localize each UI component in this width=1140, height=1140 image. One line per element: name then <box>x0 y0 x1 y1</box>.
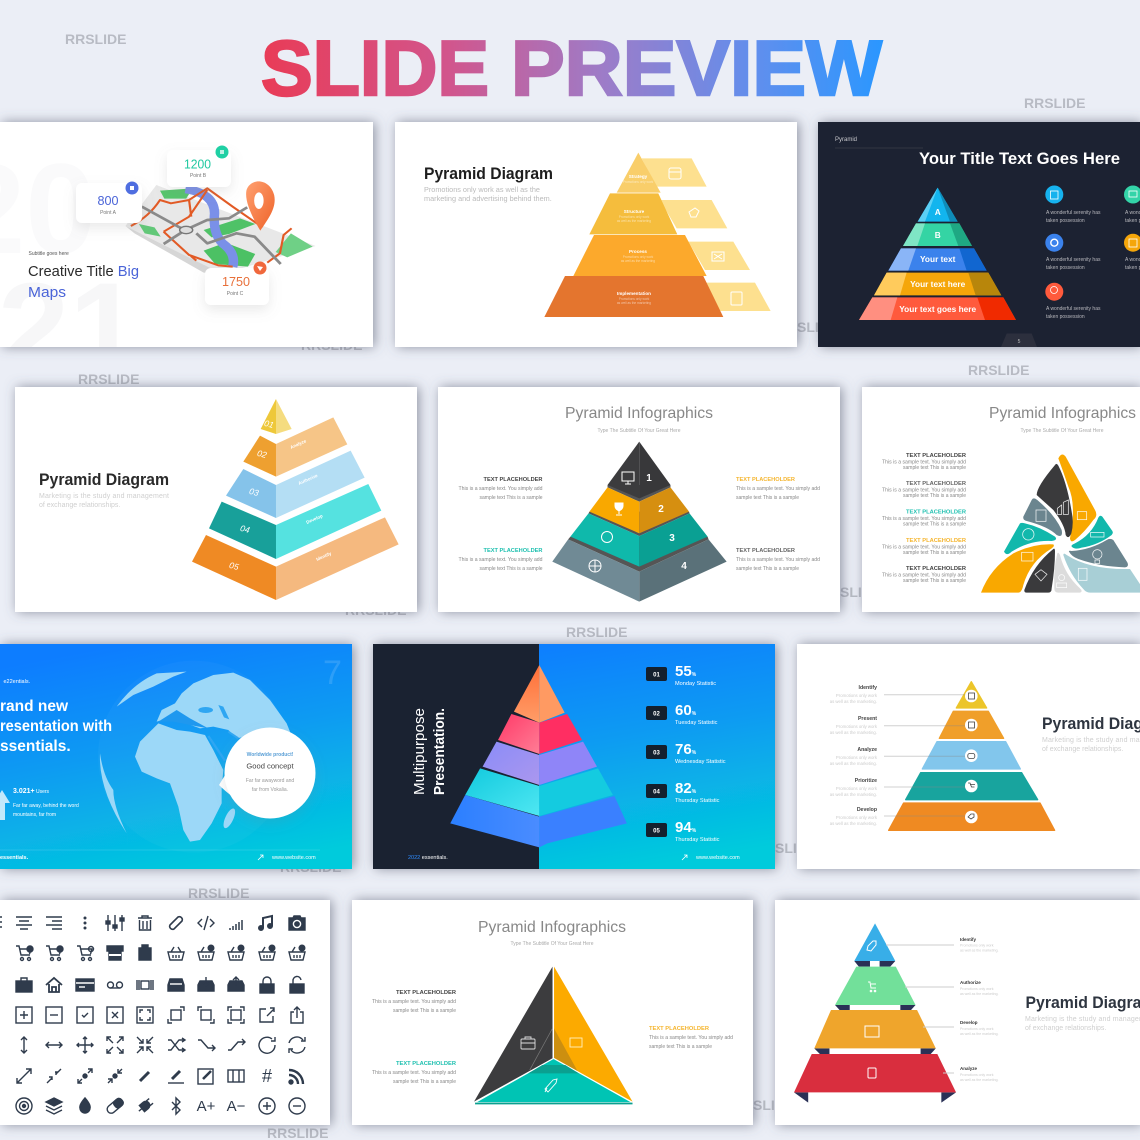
left captions: sample text This is a sample <box>393 1079 456 1085</box>
description <box>1025 1016 1140 1032</box>
tier labels: Identify <box>960 937 976 942</box>
big year numerals <box>0 138 140 400</box>
bubble text: far from Vokalia. <box>252 787 288 793</box>
tier labels: as well as the marketing. <box>960 992 999 996</box>
card: point b: 1200 <box>184 156 211 172</box>
speech bubble <box>219 728 316 818</box>
pyramid labels: Your text goes here <box>899 304 977 314</box>
tier labels: Develop <box>857 807 877 813</box>
panel: pyramid diagram isometric <box>15 387 417 612</box>
card: point a <box>76 182 142 223</box>
headline: rand new <box>0 698 69 715</box>
tier labels: as well as the marketing. <box>960 1078 999 1082</box>
description: of exchange relationships. <box>1025 1025 1106 1032</box>
tier labels: Present <box>858 716 877 722</box>
tier labels: as well as the marketing. <box>830 761 877 766</box>
tier notes: as well as the marketing <box>617 219 651 223</box>
headline: ssentials. <box>0 738 71 755</box>
stat rows: 55% <box>675 663 697 680</box>
side tabs <box>642 158 771 311</box>
caption list: TEXT PLACEHOLDER <box>906 538 966 544</box>
left captions: TEXT PLACEHOLDER <box>484 548 543 554</box>
description: Promotions only work as well as the <box>424 185 540 194</box>
spiral triangle <box>981 455 1140 593</box>
users stat: mountains, far from <box>13 812 56 818</box>
footer <box>0 850 320 861</box>
tier labels: Authorize <box>960 980 981 985</box>
icon row: miscellaneous: A− <box>227 1098 246 1115</box>
panel: multipurpose presentation <box>373 644 775 869</box>
right caption <box>649 1026 733 1050</box>
leader lines <box>886 945 954 1073</box>
watermarks: RRSLIDE <box>65 31 126 47</box>
icon row: resize and editing <box>17 1066 303 1086</box>
tier labels <box>617 174 651 296</box>
tier labels: Promotions only work <box>960 1073 994 1077</box>
tier labels: Promotions only work <box>836 724 878 729</box>
tier labels: Structure <box>624 209 645 214</box>
stat rows: 02 <box>653 712 660 718</box>
feature text: taken possession <box>1046 218 1085 224</box>
breadcrumb: Pyramid <box>835 137 857 143</box>
gradient pyramid <box>450 665 627 847</box>
tier notes: Promotions only work <box>623 180 654 184</box>
tier icons <box>589 472 634 572</box>
card: point c: 1750 <box>222 274 250 289</box>
watermarks: RRSLIDE <box>78 371 139 387</box>
heading: Your Title Text Goes Here <box>919 149 1120 168</box>
headline <box>0 698 112 755</box>
right captions: sample text This is a sample <box>736 566 799 572</box>
slide number: 7 <box>323 654 342 692</box>
panel: pyramid diagram stacked <box>775 900 1140 1125</box>
stat rows: 01 <box>653 672 660 678</box>
icon row: boxes and frames <box>16 1007 303 1023</box>
globe <box>98 661 293 853</box>
watermarks: RRSLIDE <box>1024 95 1085 111</box>
tier labels: Promotions only work <box>836 693 878 698</box>
3d pyramid <box>552 442 727 602</box>
tier captions: Analyze <box>289 438 307 450</box>
caption list: sample text This is a sample <box>903 493 966 499</box>
left captions: sample text This is a sample <box>393 1008 456 1014</box>
watermarks: RRSLIDE <box>280 859 341 875</box>
panel: globe blue slide <box>0 644 352 869</box>
tier labels: as well as the marketing. <box>960 1032 999 1036</box>
heading: Pyramid Diagram <box>424 164 553 183</box>
right caption: This is a sample text. You simply add <box>649 1035 733 1041</box>
subtitle: Type The Subtitle Of Your Great Here <box>1020 428 1104 434</box>
panel: dark pyramid <box>818 122 1140 347</box>
right captions <box>736 477 820 572</box>
card: point b <box>167 146 231 187</box>
tier labels: as well as the marketing. <box>830 730 877 735</box>
left captions: This is a sample text. You simply add <box>372 999 456 1005</box>
vertical title <box>411 708 448 795</box>
tier labels: Process <box>629 249 647 254</box>
card: point c: Point C <box>227 291 244 297</box>
caption list: sample text This is a sample <box>903 550 966 556</box>
watermarks: RRSLIDE <box>345 602 406 618</box>
stacked trapezoids <box>794 923 956 1103</box>
vertical title: Presentation. <box>431 708 448 795</box>
icon row: shopping <box>16 945 305 960</box>
icon row: alignment and tools <box>0 915 305 931</box>
tier labels: Strategy <box>629 174 648 179</box>
heading: Pyramid Diagram <box>39 470 169 489</box>
description <box>39 493 169 509</box>
tier numbers: 3 <box>669 533 675 544</box>
feature text <box>1046 210 1140 320</box>
title: slide preview <box>261 24 882 112</box>
tier labels: Analyze <box>857 747 877 753</box>
tier labels <box>960 937 999 1082</box>
headline: resentation with <box>0 718 112 735</box>
left captions <box>458 477 543 572</box>
footer: www.website.com <box>271 855 316 861</box>
caption list: TEXT PLACEHOLDER <box>906 453 966 459</box>
tier labels: as well as the marketing. <box>960 948 999 952</box>
tier captions <box>289 438 332 562</box>
folded triangle <box>474 967 633 1104</box>
tier labels: Promotions only work <box>836 786 878 791</box>
right captions: TEXT PLACEHOLDER <box>736 477 795 483</box>
icon row: miscellaneous: A+ <box>197 1098 216 1115</box>
tier labels <box>830 685 878 826</box>
caption list: sample text This is a sample <box>903 465 966 471</box>
panel: pyramid infographics four tiers <box>438 387 840 612</box>
left captions: This is a sample text. You simply add <box>458 557 543 563</box>
bubble text: Good concept <box>246 762 295 770</box>
caption list: sample text This is a sample <box>903 522 966 528</box>
tier numbers: 02 <box>256 448 268 460</box>
right caption: sample text This is a sample <box>649 1044 712 1050</box>
subtitle: Type The Subtitle Of Your Great Here <box>597 428 681 434</box>
caption list: This is a sample text. You simply add <box>882 488 966 494</box>
icon row: storage and security <box>16 976 304 993</box>
users stat: Far far away, behind the word <box>13 803 79 809</box>
big year numerals: 21 <box>0 257 140 400</box>
tier labels: Prioritize <box>855 778 877 784</box>
description: marketing and advertising behind them. <box>424 194 552 203</box>
left captions: This is a sample text. You simply add <box>458 486 543 492</box>
description: Marketing is the study and management <box>39 493 169 500</box>
tier captions: Identify <box>315 551 332 562</box>
panel: creative title big maps <box>0 114 383 355</box>
description: of exchange relationships. <box>39 502 120 509</box>
caption list <box>882 453 966 584</box>
watermarks: RRSLIDE <box>301 337 362 353</box>
triangle icons <box>521 1037 582 1092</box>
right captions: sample text This is a sample <box>736 495 799 501</box>
tier icons <box>865 941 879 1078</box>
card: point a: Point A <box>100 210 117 216</box>
tier numbers: 4 <box>681 561 687 572</box>
tier notes: as well as the marketing <box>617 301 651 305</box>
right caption: TEXT PLACEHOLDER <box>649 1026 709 1032</box>
right captions: TEXT PLACEHOLDER <box>736 548 795 554</box>
users stat: 3.021+ Users <box>13 788 50 795</box>
heading: Creative Title Big <box>28 263 139 280</box>
left captions: sample text This is a sample <box>480 495 543 501</box>
stat rows <box>646 663 726 843</box>
feature icons <box>1045 186 1140 301</box>
stat rows: Monday Statistic <box>675 681 716 687</box>
brand tag: e22entials. <box>4 679 31 685</box>
card: point c <box>205 262 269 305</box>
left captions: TEXT PLACEHOLDER <box>484 477 543 483</box>
stat rows: 60% <box>675 702 697 719</box>
stat rows: 03 <box>653 750 660 756</box>
caption list: This is a sample text. You simply add <box>882 516 966 522</box>
stat rows: 05 <box>653 828 660 834</box>
tier labels: Promotions only work <box>960 1027 994 1031</box>
feature text: taken possession <box>1046 314 1085 320</box>
stat rows: 04 <box>653 790 660 796</box>
card: point a: 800 <box>98 193 118 208</box>
footer <box>408 855 740 861</box>
tier numbers <box>228 418 275 572</box>
tier numbers: 04 <box>239 523 251 535</box>
isometric map <box>125 185 316 274</box>
pyramid labels: Your text here <box>910 279 966 289</box>
icon: map pin <box>246 181 275 231</box>
stat rows: 82% <box>675 780 697 797</box>
tier numbers: 03 <box>248 486 260 498</box>
subtitle: Subtitle goes here <box>28 251 69 257</box>
left captions: TEXT PLACEHOLDER <box>396 990 456 996</box>
watermarks: SLIDE <box>775 840 816 856</box>
panel: icon set <box>0 900 330 1125</box>
stat rows: Thursday Statistic <box>675 837 720 843</box>
caption list: This is a sample text. You simply add <box>882 460 966 466</box>
panel: pyramid infographics triangle <box>352 900 753 1125</box>
watermarks: RRSLIDE <box>188 885 249 901</box>
pyramid tiers <box>544 153 723 317</box>
bubble text <box>246 752 295 793</box>
watermarks: SLIDE <box>753 1097 794 1113</box>
tier icon badges <box>965 690 978 823</box>
heading: Maps <box>28 284 66 301</box>
caption list: This is a sample text. You simply add <box>882 544 966 550</box>
watermarks: RRSLIDE <box>968 362 1029 378</box>
description <box>1042 737 1140 753</box>
card: point b: Point B <box>190 173 207 179</box>
title: slide preview: PREVIEW <box>511 24 882 112</box>
tier numbers: 05 <box>228 560 240 572</box>
pyramid labels: B <box>935 230 941 240</box>
description <box>424 185 552 203</box>
description: of exchange relationships. <box>1042 746 1123 753</box>
caption list: TEXT PLACEHOLDER <box>906 510 966 516</box>
right captions: This is a sample text. You simply add <box>736 557 820 563</box>
tier numbers <box>646 473 687 572</box>
tier labels: Promotions only work <box>960 987 994 991</box>
panel: pyramid diagram five tiers <box>797 644 1140 869</box>
tier labels: Promotions only work <box>836 755 878 760</box>
tier notes <box>617 180 655 305</box>
tier labels: Implementation <box>617 291 651 296</box>
page tab: 5 <box>1018 339 1021 345</box>
left captions: TEXT PLACEHOLDER <box>396 1061 456 1067</box>
icon row: resize and editing: # <box>262 1066 272 1086</box>
heading: Pyramid Infographics <box>989 405 1136 422</box>
caption list: This is a sample text. You simply add <box>882 572 966 578</box>
feature text: taken possession <box>1046 265 1085 271</box>
caption list: TEXT PLACEHOLDER <box>906 566 966 572</box>
left captions: This is a sample text. You simply add <box>372 1070 456 1076</box>
stat rows: Tuesday Statistic <box>675 720 718 726</box>
tier labels: Identify <box>859 685 877 691</box>
pointer lines <box>884 695 966 816</box>
panel: pyramid diagram orange <box>395 122 797 347</box>
bubble text: Worldwide product! <box>247 752 294 758</box>
title: slide preview: SLIDE <box>261 24 489 112</box>
vertical title: Multipurpose <box>411 708 428 795</box>
tier numbers: 1 <box>646 473 652 484</box>
tier labels: as well as the marketing. <box>830 699 877 704</box>
tier captions: Develop <box>305 513 324 525</box>
tier labels: Promotions only work <box>836 815 878 820</box>
caption list: TEXT PLACEHOLDER <box>906 481 966 487</box>
subtitle: Type The Subtitle Of Your Great Here <box>510 941 594 947</box>
tier labels: as well as the marketing. <box>830 821 877 826</box>
stat rows: 76% <box>675 741 697 758</box>
tier notes: Promotions only work <box>619 297 650 301</box>
isometric pyramid <box>192 399 399 600</box>
footer: 2022 essentials. <box>408 855 448 861</box>
rounded pyramid <box>889 682 1055 830</box>
tier labels: as well as the marketing. <box>830 792 877 797</box>
left captions: sample text This is a sample <box>480 566 543 572</box>
heading: Pyramid Infographics <box>565 405 713 422</box>
footer: essentials. <box>0 855 29 861</box>
tier captions: Authorize <box>297 473 319 486</box>
users stat <box>0 788 79 820</box>
tier numbers: 2 <box>658 504 664 515</box>
left captions <box>372 990 456 1085</box>
panel: pyramid infographics spiral <box>862 387 1140 612</box>
pyramid labels: A <box>935 207 941 217</box>
feature text: A wonderful serenity has <box>1046 210 1101 216</box>
feature text: A wonderful serenity has <box>1046 257 1101 263</box>
tier notes: as well as the marketing <box>621 259 655 263</box>
stat rows: Wednesday Statistic <box>675 759 726 765</box>
stat rows: 94% <box>675 819 697 836</box>
tier labels: Promotions only work <box>960 944 994 948</box>
page tab <box>1001 334 1037 347</box>
watermarks: SLIDE <box>797 319 838 335</box>
tier numbers: 01 <box>263 418 275 430</box>
stat rows: Thursday Statistic <box>675 798 720 804</box>
bubble text: Far far awayword and <box>246 778 294 784</box>
tier labels: Develop <box>960 1020 978 1025</box>
feature text: A wonderful serenity has <box>1046 306 1101 312</box>
pyramid labels: Your text <box>920 254 956 264</box>
watermarks: SLIDE <box>840 584 881 600</box>
footer: www.website.com <box>695 855 740 861</box>
stacked pyramid <box>859 188 1016 320</box>
pyramid labels <box>899 207 977 314</box>
tier notes: Promotions only work <box>623 255 654 259</box>
tier labels: Analyze <box>960 1066 978 1071</box>
right captions: This is a sample text. You simply add <box>736 486 820 492</box>
watermarks: RRSLIDE <box>566 624 627 640</box>
icons on side tabs <box>669 168 742 305</box>
icon row: arrows <box>21 1037 305 1053</box>
heading: Pyramid Infographics <box>478 919 626 936</box>
heading <box>28 263 139 301</box>
tier notes: Promotions only work <box>619 215 650 219</box>
icon row: miscellaneous <box>16 1097 305 1115</box>
caption list: sample text This is a sample <box>903 578 966 584</box>
spiral icons <box>1022 500 1104 588</box>
